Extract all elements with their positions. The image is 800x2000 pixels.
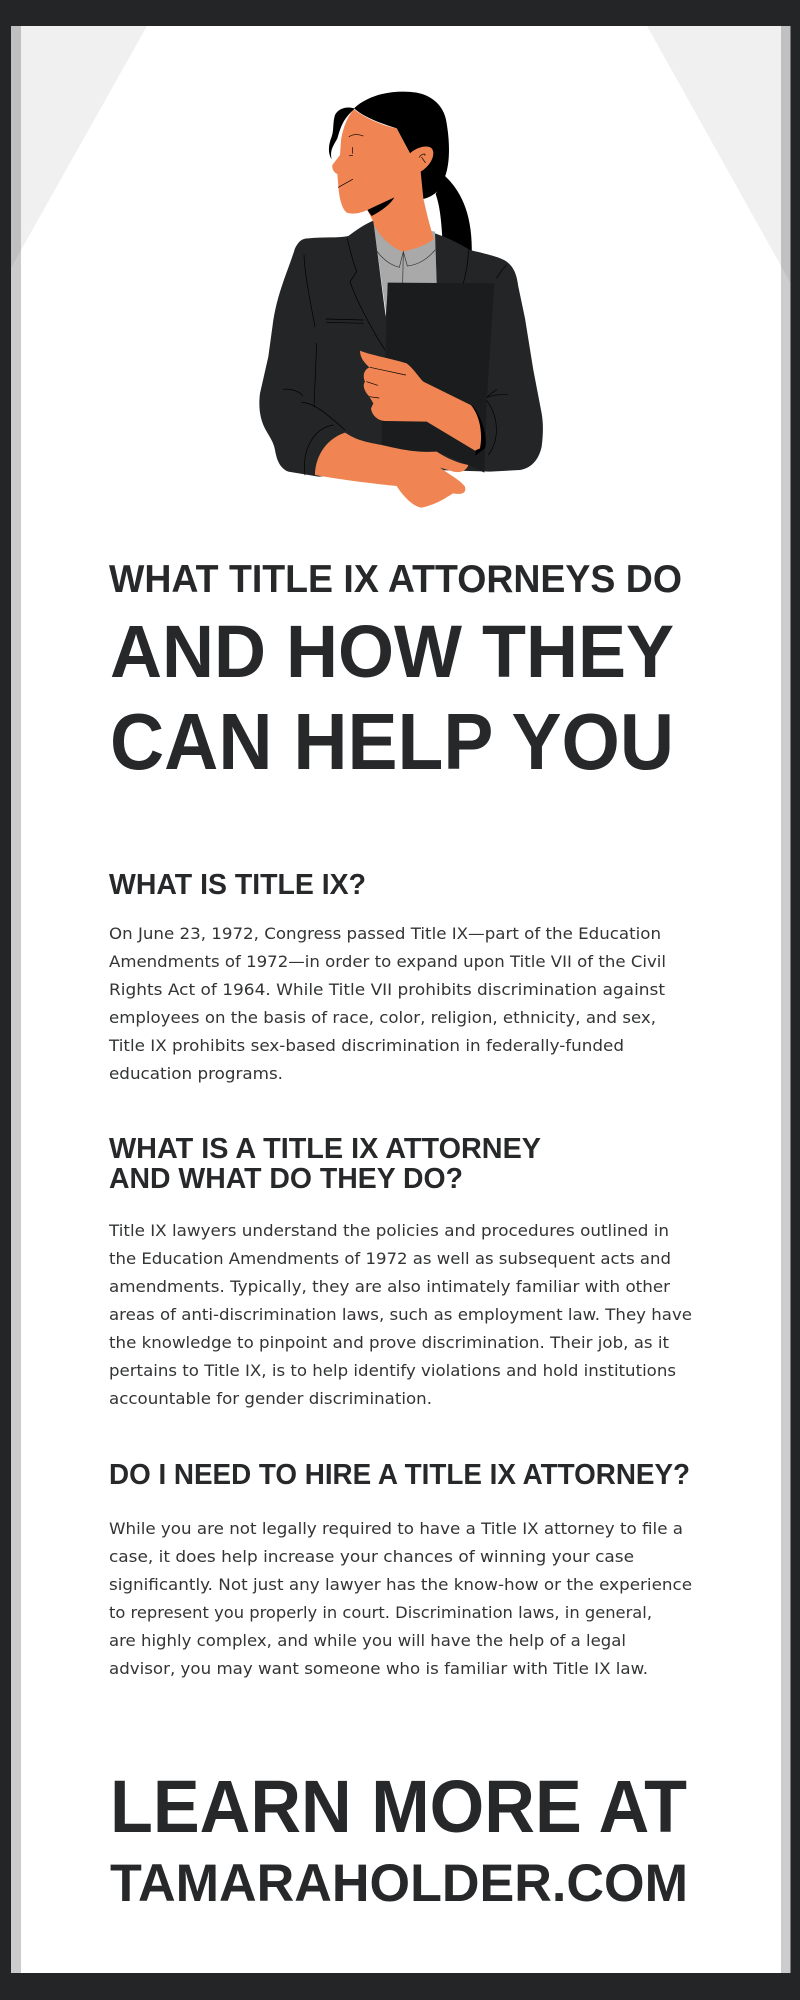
folder bbox=[382, 283, 494, 473]
title bbox=[109, 558, 682, 786]
lower arm and hand bbox=[315, 433, 468, 508]
sleeve cuff shadow bbox=[472, 404, 486, 456]
body text: On June 23, 1972, Congress passed Title IX—part of the Education bbox=[109, 924, 661, 943]
corner shade: left bbox=[11, 26, 147, 268]
body text bbox=[109, 1519, 692, 1678]
collar lines bbox=[376, 249, 435, 283]
body text: are highly complex, and while you will have the help of a legal bbox=[109, 1631, 626, 1650]
hair strand bbox=[329, 107, 354, 159]
corner shade: right bbox=[647, 26, 790, 283]
jacket and hand detail lines bbox=[283, 238, 507, 475]
heading bbox=[109, 1133, 541, 1195]
body text bbox=[108, 924, 666, 1083]
body text: amendments. Typically, they are also intimately familiar with other bbox=[109, 1277, 670, 1296]
body text: Amendments of 1972—in order to expand upon Title VII of the Civil bbox=[109, 952, 666, 971]
title: WHAT TITLE IX ATTORNEYS DO bbox=[109, 558, 682, 601]
section: what is Title IX bbox=[108, 869, 666, 1083]
body text: case, it does help increase your chances of winning your case bbox=[109, 1547, 634, 1566]
body text: pertains to Title IX, is to help identify violations and hold institutions bbox=[109, 1361, 676, 1380]
hair and head top bbox=[354, 92, 449, 199]
jacket bbox=[259, 221, 543, 477]
body text bbox=[108, 1221, 692, 1408]
face and neck bbox=[332, 109, 434, 252]
ponytail bbox=[436, 176, 472, 257]
shirt bbox=[373, 222, 437, 318]
footer call to action: LEARN MORE AT bbox=[110, 1765, 687, 1848]
body text: Title IX prohibits sex-based discrimination in federally-funded bbox=[108, 1036, 624, 1055]
body text: accountable for gender discrimination. bbox=[109, 1389, 432, 1408]
footer call to action: TAMARAHOLDER.COM bbox=[110, 1854, 688, 1913]
body text: Title IX lawyers understand the policies and procedures outlined in bbox=[108, 1221, 669, 1240]
body text: the knowledge to pinpoint and prove discrimination. Their job, as it bbox=[109, 1333, 669, 1352]
neck shadow bbox=[367, 197, 394, 216]
body text: to represent you properly in court. Discrimination laws, in general, bbox=[109, 1603, 652, 1622]
illustration: attorney holding a folder bbox=[259, 92, 543, 508]
title: CAN HELP YOU bbox=[110, 697, 674, 786]
facial lines bbox=[338, 135, 425, 187]
body text: education programs. bbox=[109, 1064, 283, 1083]
body text: the Education Amendments of 1972 as well as subsequent acts and bbox=[109, 1249, 671, 1268]
heading: AND WHAT DO THEY DO? bbox=[109, 1163, 463, 1195]
heading: WHAT IS A TITLE IX ATTORNEY bbox=[109, 1133, 541, 1165]
heading: WHAT IS TITLE IX? bbox=[109, 869, 366, 901]
footer call to action bbox=[110, 1765, 688, 1913]
upper hand and arm bbox=[360, 351, 481, 451]
title: AND HOW THEY bbox=[110, 609, 674, 693]
heading: DO I NEED TO HIRE A TITLE IX ATTORNEY? bbox=[109, 1459, 690, 1491]
body text: While you are not legally required to have a Title IX attorney to file a bbox=[109, 1519, 683, 1538]
body text: Rights Act of 1964. While Title VII prohibits discrimination against bbox=[109, 980, 665, 999]
body text: advisor, you may want someone who is familiar with Title IX law. bbox=[109, 1659, 648, 1678]
section: do I need to hire bbox=[109, 1459, 692, 1678]
body text: significantly. Not just any lawyer has the know-how or the experience bbox=[109, 1575, 692, 1594]
body text: areas of anti-discrimination laws, such as employment law. They have bbox=[109, 1305, 692, 1324]
section: what is a Title IX attorney bbox=[108, 1133, 692, 1408]
body text: employees on the basis of race, color, religion, ethnicity, and sex, bbox=[109, 1008, 656, 1027]
